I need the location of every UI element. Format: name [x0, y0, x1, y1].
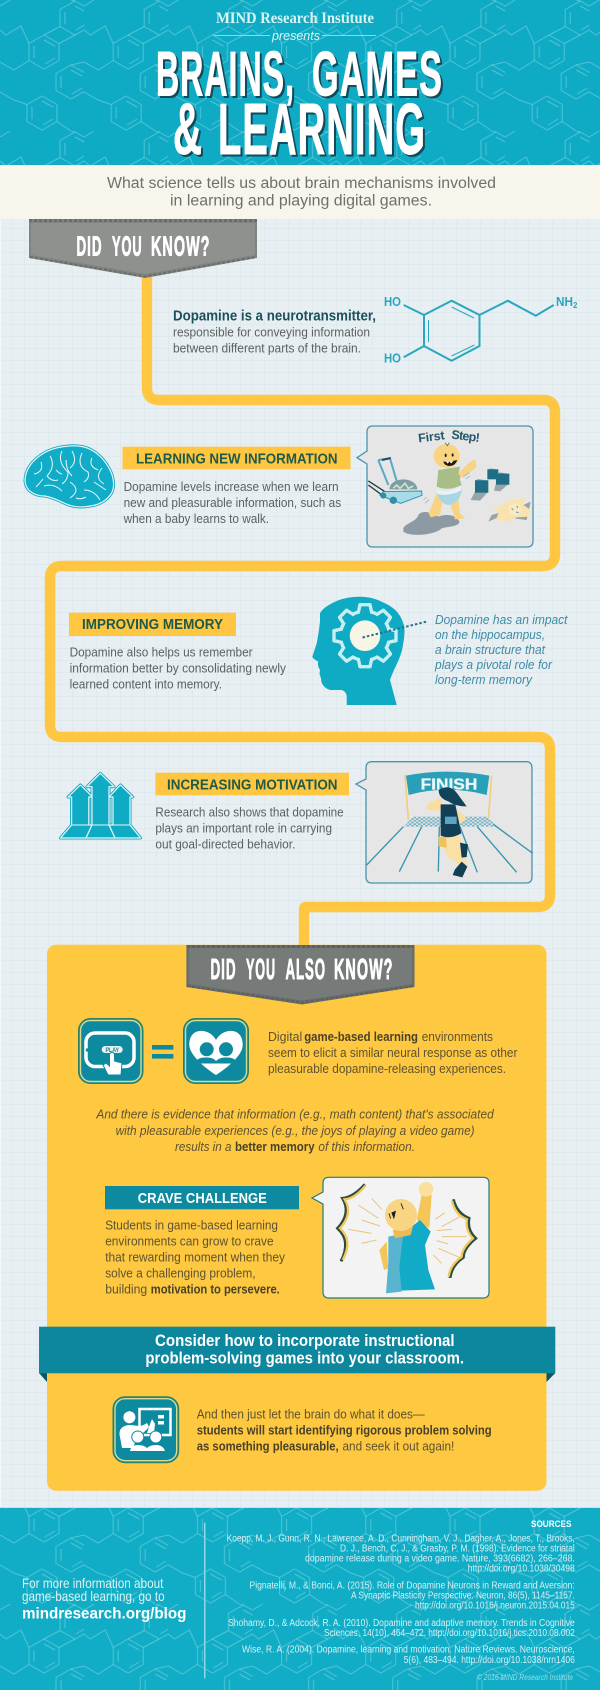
text: evidence statement: And there is evidence that information (e.g., math content) that's associated [95, 1108, 495, 1122]
icon: dopamine molecule: 2 [573, 301, 578, 310]
sources: http://doi.org/10.1038/30498 [468, 1564, 575, 1575]
title: BRAINS, [156, 40, 295, 110]
text: evidence statement: with pleasurable experiences (e.g., the joys of playing a video game) [116, 1124, 475, 1138]
heading: LEARNING NEW INFORMATION [136, 451, 338, 467]
heading [69, 613, 236, 636]
copyright: © 2016 MIND Research Institute [477, 1673, 573, 1682]
text: evidence statement: of this information. [318, 1140, 415, 1154]
title [156, 40, 443, 170]
banner: did you know [29, 219, 257, 278]
sources: 5(6), 483–494. http://doi.org/10.1038/nrn1406 [404, 1655, 575, 1666]
banner: did you also know: ALSO [286, 954, 326, 986]
call to visit blog [22, 1575, 186, 1622]
icon: tablet play [78, 1018, 143, 1084]
subtitle band: in learning and playing digital games. [170, 192, 432, 210]
body text [70, 646, 287, 692]
text: hippocampus note: a brain structure that [435, 643, 545, 657]
text: dopamine definition [173, 308, 376, 356]
text: hippocampus note [434, 613, 568, 687]
text: game-based learning: Digital [268, 1030, 302, 1044]
sources: SOURCES [531, 1519, 571, 1530]
text: crave challenge body: motivation to persevere. [151, 1282, 280, 1296]
body text: out goal-directed behavior. [155, 838, 295, 852]
title: LEARNING [218, 90, 426, 170]
subtitle band [0, 165, 600, 219]
text: hippocampus note: long-term memory [435, 673, 533, 687]
text: game-based learning: pleasurable dopamine-releasing experiences. [268, 1062, 506, 1076]
icon: dopamine molecule: HO [384, 352, 401, 366]
footer [0, 1507, 600, 1690]
banner: did you also know: YOU [246, 954, 276, 986]
body text: Dopamine also helps us remember [70, 646, 253, 660]
icon: tablet play: PLAY [106, 1048, 119, 1054]
illustration: baby first step: First [417, 428, 446, 445]
text: hippocampus note: plays a pivotal role for [434, 658, 553, 672]
title: GAMES [312, 40, 443, 110]
heading [122, 447, 350, 469]
text: dopamine definition: between different parts of the brain. [173, 342, 361, 356]
banner: did you also know [186, 945, 414, 1004]
icon: heart with people [184, 1018, 248, 1084]
body text: new and pleasurable information, such as [124, 496, 341, 510]
call to visit blog: game-based learning, go to [22, 1588, 165, 1604]
body text: Research also shows that dopamine [155, 806, 344, 820]
banner: did you know: KNOW? [151, 230, 210, 262]
connector path [50, 270, 555, 950]
text: crave challenge body: Students in game-based learning [105, 1218, 278, 1232]
text: game-based learning: environments [422, 1030, 493, 1044]
call to visit blog: mindresearch.org/blog [22, 1606, 186, 1622]
panel: did you also know [39, 945, 555, 1491]
banner: did you also know: KNOW? [334, 954, 394, 986]
body text: learned content into memory. [70, 678, 222, 692]
ribbon: call to action: problem-solving games into your classroom. [145, 1349, 464, 1367]
icon: brain [25, 446, 114, 507]
text: closing statement [197, 1407, 492, 1453]
text: crave challenge body [105, 1218, 286, 1296]
panel: learning new information [122, 447, 350, 526]
icon: head with gear [312, 597, 427, 705]
call to visit blog: For more information about [22, 1575, 163, 1591]
presents line: presents [271, 28, 320, 43]
body text [155, 806, 344, 852]
text: closing statement: and seek it out again! [342, 1439, 454, 1453]
text: dopamine definition: responsible for conveying information [173, 326, 370, 340]
text: evidence statement: results in a [175, 1140, 232, 1154]
icon: rising arrows [60, 773, 140, 838]
body text: when a baby learns to walk. [123, 512, 269, 526]
panel: improving memory [69, 613, 287, 692]
ribbon: call to action [39, 1327, 555, 1382]
icon: dopamine molecule [384, 295, 578, 366]
text: closing statement: students will start identifying rigorous problem solving [197, 1423, 492, 1437]
sources [227, 1519, 575, 1666]
text: evidence statement: better memory [235, 1140, 315, 1154]
subtitle band: What science tells us about brain mechanisms involved [107, 175, 496, 192]
illustration: runner at finish line: FINISH [421, 776, 477, 793]
publisher name: MIND Research Institute [216, 10, 374, 27]
text: crave challenge body: solve a challenging problem, [105, 1266, 256, 1280]
illustration: runner at finish line [356, 762, 533, 883]
panel: increasing motivation [155, 773, 349, 852]
header band [0, 0, 600, 170]
banner: did you know: DID [76, 230, 102, 262]
heading: IMPROVING MEMORY [82, 617, 223, 633]
text: closing statement: as something pleasurable, [197, 1439, 339, 1453]
banner: did you also know: DID [210, 954, 236, 986]
page background grid [0, 219, 600, 1509]
illustration: triumphant figure [312, 1177, 489, 1298]
text: dopamine definition: Dopamine is a neurotransmitter, [173, 308, 376, 324]
heading: crave challenge [105, 1186, 299, 1209]
text: game-based learning: seem to elicit a similar neural response as other [268, 1046, 517, 1060]
body text: information better by consolidating newly [70, 662, 287, 676]
title: & [173, 90, 203, 170]
text: crave challenge body: that rewarding moment when they [105, 1250, 286, 1264]
icon: dopamine molecule: NH [556, 295, 573, 309]
text: crave challenge body: environments can grow to crave [105, 1234, 274, 1248]
text: evidence statement [95, 1108, 495, 1154]
illustration: baby first step [357, 426, 533, 547]
icon: classroom [113, 1397, 179, 1463]
icon: dopamine molecule: HO [384, 295, 401, 309]
illustration: baby first step: Step! [451, 428, 481, 445]
body text: plays an important role in carrying [155, 822, 332, 836]
text: crave challenge body: building [105, 1282, 147, 1296]
heading: crave challenge: CRAVE CHALLENGE [138, 1191, 267, 1207]
text: game-based learning: game-based learning [304, 1030, 418, 1044]
banner: did you know: YOU [112, 230, 142, 262]
body text [123, 480, 341, 526]
heading: INCREASING MOTIVATION [167, 777, 338, 793]
text: hippocampus note: on the hippocampus, [435, 628, 545, 642]
text: closing statement: And then just let the brain do what it does— [197, 1407, 425, 1421]
icon: equals sign [152, 1045, 173, 1059]
heading [155, 773, 349, 795]
body text: Dopamine levels increase when we learn [124, 480, 339, 494]
text: hippocampus note: Dopamine has an impact [435, 613, 568, 627]
ribbon: call to action: Consider how to incorporate instructional [155, 1332, 455, 1350]
text: game-based learning [268, 1030, 517, 1076]
